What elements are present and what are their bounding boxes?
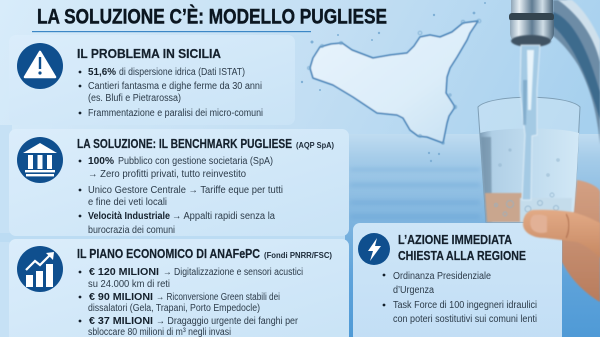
bullet list: (es. Blufi e Pietrarossa) [88, 93, 181, 104]
bullet list with amounts: € 120 MILIONI [89, 267, 159, 278]
panel: il problema in Sicilia [9, 35, 295, 125]
bullet list: 51,6% [88, 67, 116, 78]
heading: IL PROBLEMA IN SICILIA [77, 47, 221, 61]
bullet list: → Zero profitti privati, tutto reinvestito [88, 169, 246, 180]
bullet list with amounts: € 37 MILIONI [89, 316, 153, 327]
bullet list: → Appalti rapidi senza la [172, 211, 275, 222]
panel: la soluzione, benchmark pugliese [9, 129, 349, 236]
bullet list: e fine dei veti locali [88, 197, 167, 208]
bullet list: Velocità Industriale [88, 211, 170, 222]
heading: LA SOLUZIONE: IL BENCHMARK PUGLIESE [77, 137, 292, 151]
icon: institution building [17, 137, 63, 183]
heading: IL PIANO ECONOMICO DI ANAFePC [77, 247, 260, 261]
bullet list: Cantieri fantasma e dighe ferme da 30 anni [88, 81, 262, 92]
illustration: thumb over panel [523, 210, 600, 258]
heading: L’AZIONE IMMEDIATA [398, 233, 512, 247]
bullet list: 100% [88, 156, 114, 167]
bullet list: Pubblico con gestione societaria (SpA) [118, 156, 273, 167]
bullet list with amounts: € 90 MILIONI [89, 292, 153, 303]
bullet list [79, 156, 283, 236]
heading: CHIESTA ALLA REGIONE [398, 249, 526, 263]
bullet list: Ordinanza Presidenziale [393, 271, 491, 282]
bullet list with amounts: → Riconversione Green stabili dei [156, 292, 280, 303]
bullet list with amounts: dissalatori (Gela, Trapani, Porto Empedocle) [88, 303, 260, 314]
icon: warning triangle [17, 43, 63, 89]
bullet list with amounts: su 24.000 km di reti [88, 279, 170, 290]
illustration: water splash shaped like Sicily [301, 2, 486, 162]
bullet list [79, 67, 263, 119]
panel: azione immediata [353, 223, 562, 337]
icon: rising bar chart [17, 246, 63, 292]
bullet list with amounts: → Dragaggio urgente dei fanghi per [156, 316, 299, 327]
title: LA SOLUZIONE C’È: MODELLO PUGLIESE [37, 6, 387, 28]
icon: lightning bolt [358, 233, 390, 265]
bullet list: Frammentazione e paralisi dei micro-comuni [88, 108, 263, 119]
bullet list: con poteri sostitutivi sui comuni lenti [393, 314, 537, 325]
bullet list with amounts: → Digitalizzazione e sensori acustici [163, 267, 303, 278]
illustration: glass of water with stream [478, 45, 580, 222]
bullet list: Task Force di 100 ingegneri idraulici [393, 300, 537, 311]
panel: il piano economico [9, 239, 349, 337]
heading: (Fondi PNRR/FSC) [264, 251, 332, 260]
bullet list [383, 271, 537, 325]
heading [398, 233, 526, 263]
bullet list: Unico Gestore Centrale → Tariffe eque per tutti [88, 185, 283, 196]
illustration: chrome faucet [509, 0, 600, 145]
bullet list: burocrazia dei comuni [88, 225, 175, 236]
bullet list with amounts [79, 267, 303, 337]
illustration: hand behind panel [562, 180, 600, 302]
heading: (AQP SpA) [296, 141, 334, 150]
bullet list: di dispersione idrica (Dati ISTAT) [119, 67, 245, 78]
bullet list: d’Urgenza [393, 285, 434, 296]
